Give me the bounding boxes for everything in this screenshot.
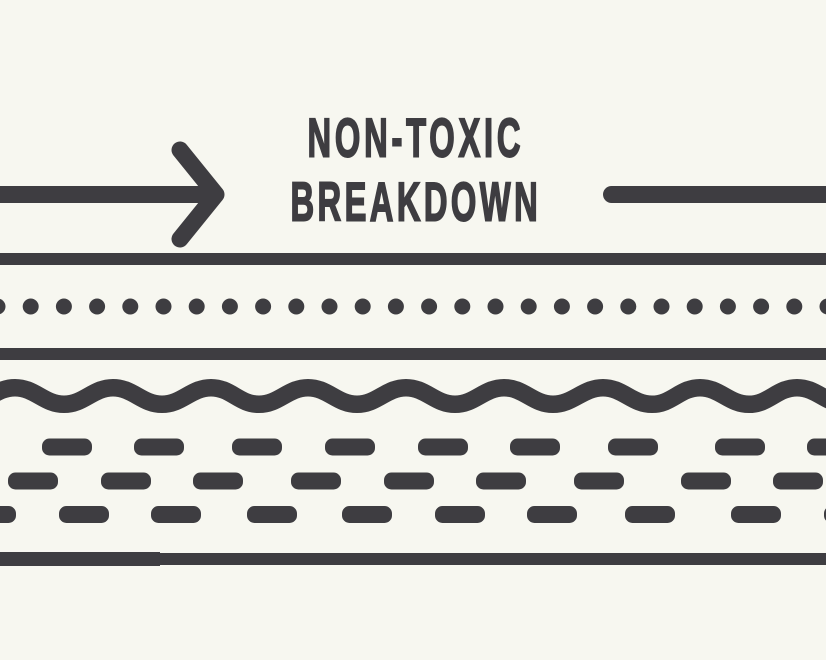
wavy line (0, 388, 826, 404)
title: NON-TOXIC (308, 107, 521, 169)
upper horizontal band line (0, 253, 826, 265)
dotted row (0, 298, 826, 314)
title: BREAKDOWN (290, 171, 538, 233)
dashes row 1 (42, 438, 826, 456)
line continuing from title (612, 186, 826, 203)
dashes row 3 (0, 506, 826, 523)
arrow pointing right (0, 150, 216, 239)
title (290, 107, 538, 233)
middle horizontal band line (0, 348, 826, 360)
dashes row 2 (8, 472, 823, 490)
bottom horizontal band line (0, 552, 826, 566)
